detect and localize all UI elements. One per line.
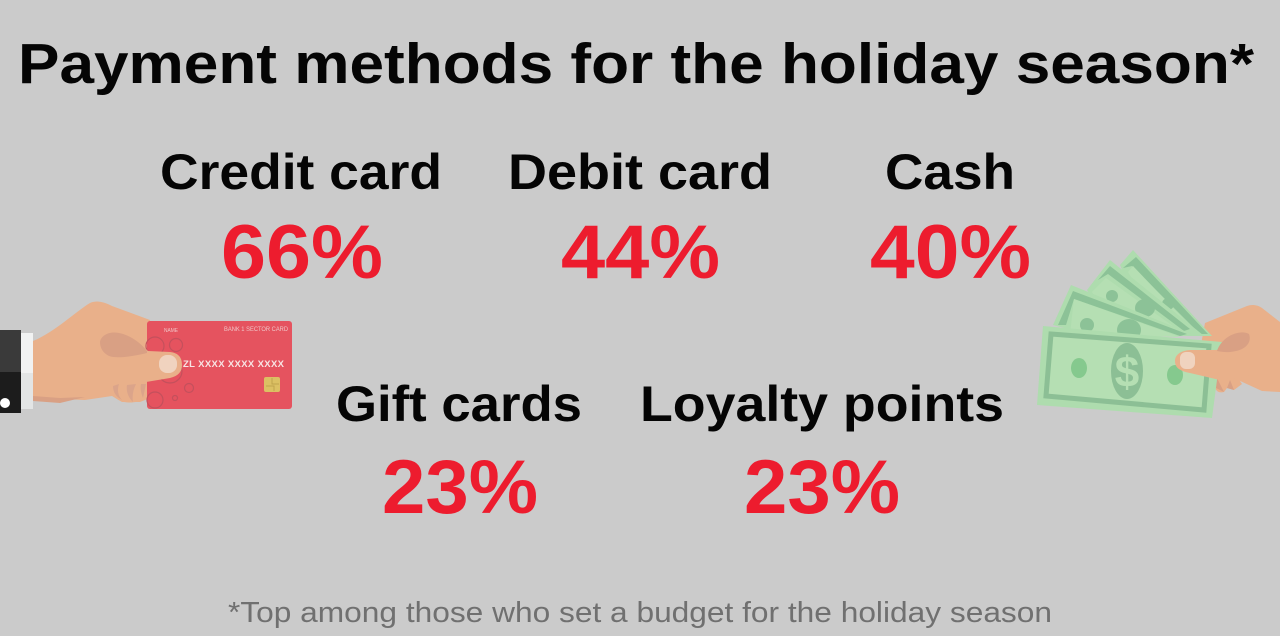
footnote: *Top among those who set a budget for the holiday season bbox=[228, 597, 1052, 629]
icon: hand holding credit card: NAME bbox=[164, 328, 179, 334]
stat: credit card: Credit card bbox=[160, 144, 442, 200]
stat: gift cards bbox=[336, 376, 582, 530]
icon: hand holding cash: $ bbox=[1115, 348, 1139, 397]
title: Payment methods for the holiday season* bbox=[18, 32, 1255, 96]
icon: hand holding credit card: ZL XXXX XXXX XXXX bbox=[183, 359, 285, 370]
stat: loyalty points: 23% bbox=[744, 445, 900, 530]
stat: credit card bbox=[160, 144, 442, 295]
icon: hand holding cash bbox=[1037, 250, 1280, 418]
stat: debit card bbox=[508, 144, 772, 295]
front bill bbox=[1037, 326, 1222, 418]
stat: debit card: Debit card bbox=[508, 144, 772, 200]
stat: gift cards: Gift cards bbox=[336, 376, 582, 432]
bills fan bbox=[1120, 250, 1212, 336]
stat: cash: Cash bbox=[885, 144, 1015, 200]
fingers and thumb bbox=[107, 380, 147, 403]
icon: hand holding credit card: BANK 1 SECTOR CARD bbox=[224, 327, 289, 333]
stat: gift cards: 23% bbox=[382, 445, 538, 530]
stat: loyalty points bbox=[640, 376, 1004, 530]
stat: loyalty points: Loyalty points bbox=[640, 376, 1004, 432]
stat: credit card: 66% bbox=[221, 210, 383, 295]
thumb bbox=[1175, 345, 1252, 381]
icon: hand holding credit card bbox=[0, 302, 292, 413]
stat: cash bbox=[870, 144, 1031, 295]
stat: cash: 40% bbox=[870, 210, 1031, 295]
credit card bbox=[147, 321, 292, 409]
stat: debit card: 44% bbox=[561, 210, 720, 295]
